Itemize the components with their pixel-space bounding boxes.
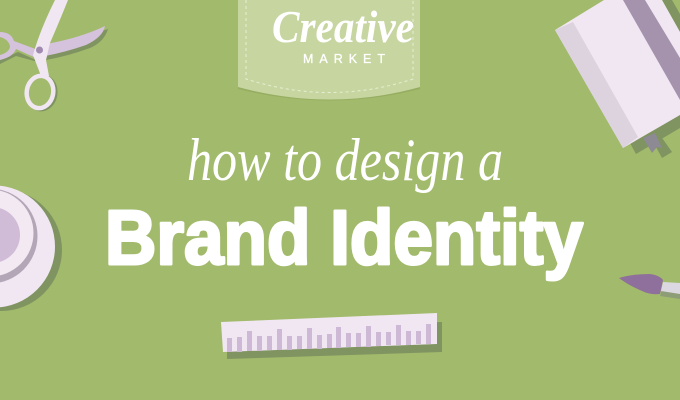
- icon: ruler: [221, 313, 442, 359]
- icon: paintbrush: [619, 274, 680, 299]
- logo subtitle: MARKET: [303, 52, 385, 66]
- icon: scissors: [0, 0, 108, 114]
- heading: Brand Identity: Brand Identity: [105, 195, 583, 281]
- heading: how to design a: how to design a: [187, 127, 503, 193]
- icon: plate: [0, 186, 62, 311]
- ruler ticks: [227, 324, 431, 352]
- badge: Creative Market pocket: [238, 0, 420, 100]
- bookmark ribbon: [643, 133, 672, 158]
- logo wordmark: Creative: [272, 1, 414, 52]
- icon: book: [555, 0, 680, 158]
